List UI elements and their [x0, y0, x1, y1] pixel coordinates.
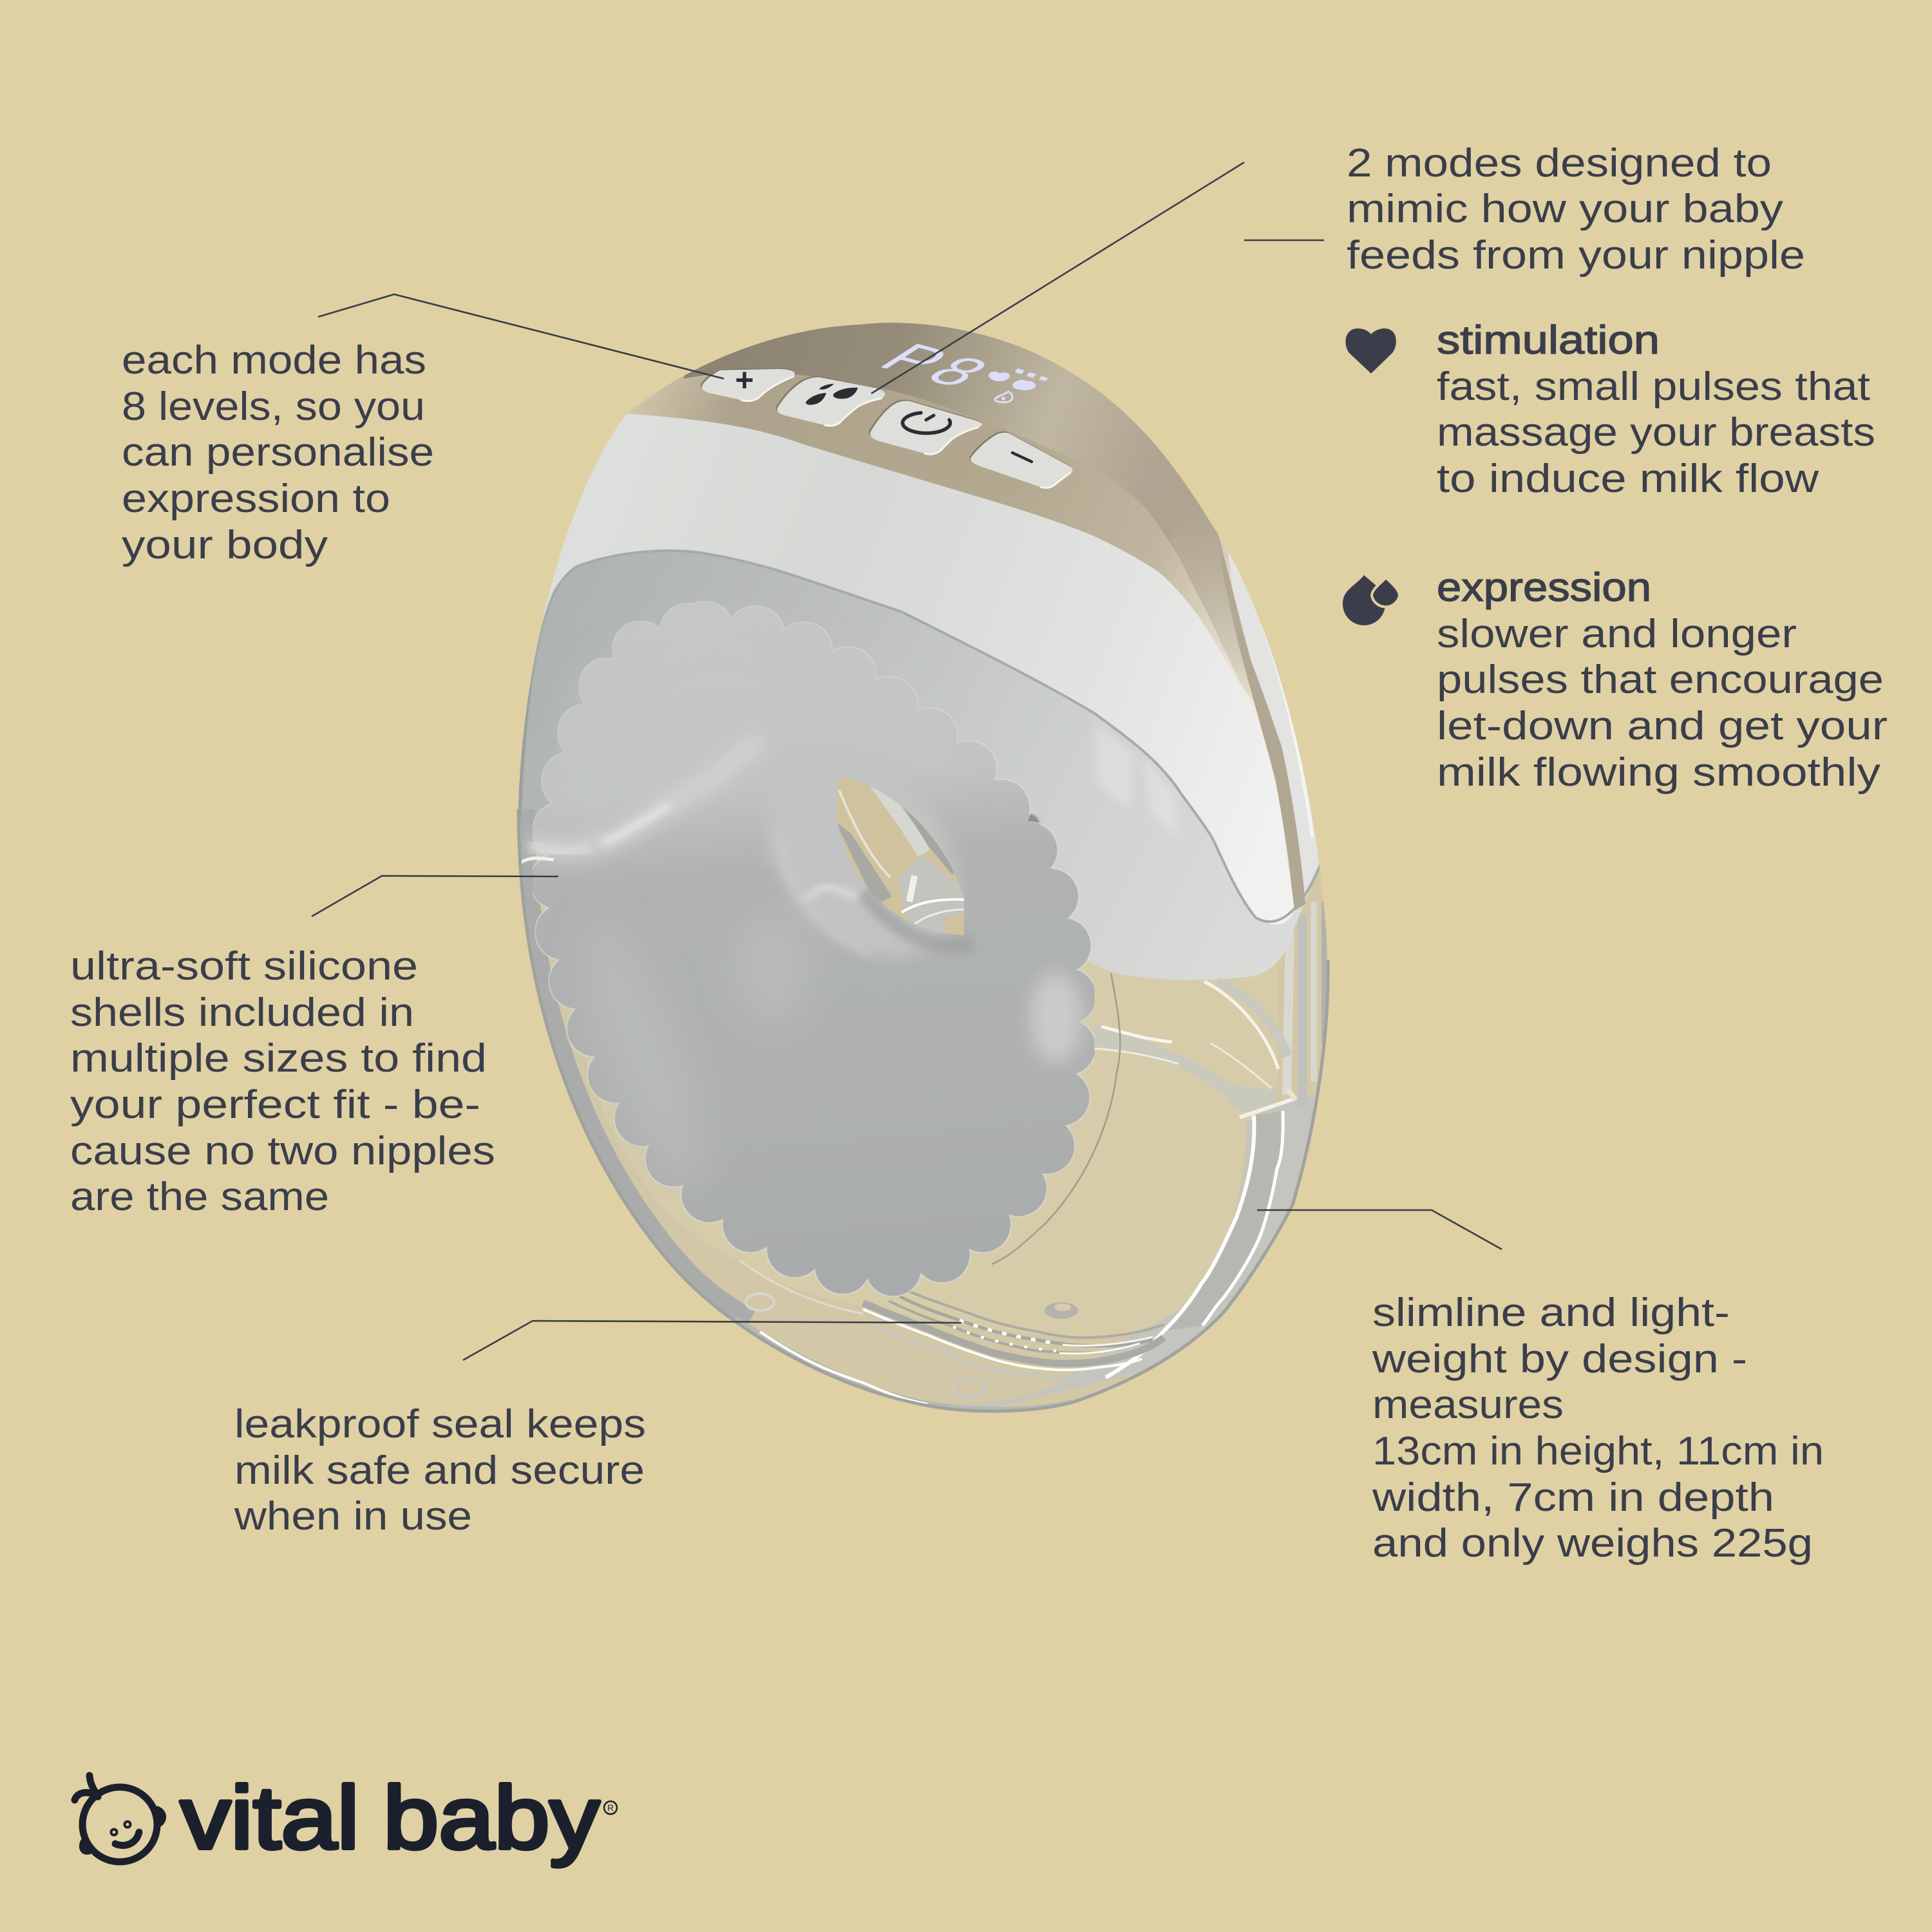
text: slimline: measures — [1372, 1383, 1564, 1427]
opening interior — [836, 777, 964, 935]
text: slimline: width, 7cm in depth — [1372, 1475, 1774, 1520]
button: plus — [701, 362, 795, 401]
bottom rim highlight — [760, 1332, 927, 1404]
white cap band — [509, 413, 1294, 925]
small nubs on shell — [746, 814, 1078, 1397]
text: stimulation: to induce milk flow — [1437, 457, 1819, 501]
clear right band — [953, 1095, 1340, 1417]
text: levels: your body — [122, 523, 328, 567]
text: slimline: slimline and light- — [1372, 1291, 1730, 1335]
registered mark: R — [607, 1803, 614, 1813]
cap gold band — [580, 309, 1269, 734]
text: stimulation — [1437, 318, 1875, 501]
callout line: leakproof seal — [463, 1321, 961, 1360]
button: plus: + — [735, 362, 754, 398]
translucent crescent under the cap — [519, 551, 1320, 980]
text: expression: milk flowing smoothly — [1437, 750, 1880, 795]
logo: vital baby — [75, 1768, 617, 1868]
neck and opening — [729, 719, 997, 994]
side panel light — [1170, 489, 1262, 708]
milk chamber interior — [580, 837, 1278, 1337]
text: silicone shells: cause no two nipples — [70, 1129, 495, 1173]
display readout: P8 — [864, 335, 1011, 397]
button: mode drops — [776, 376, 885, 426]
text: levels: expression to — [122, 477, 390, 521]
text: slimline: 13cm in height, 11cm in — [1372, 1429, 1824, 1473]
text: expression: slower and longer — [1437, 612, 1797, 656]
leakproof seal ribs — [741, 1261, 1164, 1383]
text: modes intro — [1347, 141, 1805, 278]
callout line: modes — [871, 162, 1244, 393]
text: stimulation: fast, small pulses that — [1437, 365, 1870, 409]
text: expression — [1437, 565, 1888, 795]
callout line: modes text tick — [1244, 240, 1324, 241]
text: expression: pulses that encourage — [1437, 658, 1884, 702]
back white housing strip — [1216, 531, 1320, 907]
text: modes intro: feeds from your nipple — [1347, 233, 1805, 278]
text: leakproof seal: when in use — [234, 1494, 472, 1539]
icon: drops — [1343, 575, 1399, 625]
button: minus — [969, 431, 1073, 488]
clear band between highlights — [1164, 1111, 1283, 1331]
soft body shading — [559, 910, 729, 1202]
text: levels: each mode has — [122, 338, 426, 383]
bright clear edge — [1106, 1090, 1296, 1378]
text: leakproof seal: leakproof seal keeps — [234, 1402, 646, 1446]
icon: baby face — [75, 1776, 162, 1862]
text: levels — [122, 338, 434, 567]
text: modes intro: 2 modes designed to — [1347, 141, 1772, 185]
text: leakproof seal — [234, 1402, 646, 1539]
wordmark — [180, 1768, 600, 1868]
text: levels: 8 levels, so you — [122, 384, 425, 429]
text: silicone shells: your perfect fit - be- — [70, 1083, 480, 1127]
text: silicone shells — [70, 944, 495, 1219]
display dome and side panel — [683, 309, 1262, 708]
text: expression: let-down and get your — [1437, 704, 1888, 748]
text: slimline — [1372, 1291, 1824, 1566]
text: leakproof seal: milk safe and secure — [234, 1448, 645, 1493]
silicone shell with scalloped edge — [530, 618, 1082, 1269]
wordmark: baby — [383, 1768, 600, 1868]
reflections on crescent — [1095, 721, 1179, 837]
upper lobe light — [567, 618, 966, 831]
text: levels: can personalise — [122, 430, 434, 475]
callout line: levels — [318, 294, 724, 379]
text: slimline: weight by design - — [1372, 1337, 1747, 1381]
text: slimline: and only weighs 225g — [1372, 1521, 1813, 1566]
inner channel — [992, 973, 1288, 1264]
wordmark: vital — [180, 1768, 359, 1868]
clear side column — [1287, 902, 1324, 1108]
text: modes intro: mimic how your baby — [1347, 187, 1783, 231]
text: stimulation: stimulation — [1437, 318, 1660, 363]
text: silicone shells: are the same — [70, 1175, 329, 1219]
clear shell base — [536, 692, 1328, 1406]
bottom clear rim — [734, 1320, 1074, 1412]
text: silicone shells: shells included in — [70, 990, 414, 1035]
ridge highlight — [530, 739, 762, 849]
button: power — [869, 400, 982, 454]
text: silicone shells: ultra-soft silicone — [70, 944, 418, 989]
text: expression: expression — [1437, 565, 1651, 610]
registered mark — [604, 1801, 617, 1814]
dark gold stripe — [1215, 523, 1305, 911]
callout line: slimline — [1257, 1210, 1502, 1249]
text: stimulation: massage your breasts — [1437, 410, 1875, 455]
product: wearable breast pump — [502, 309, 1340, 1423]
icon: heart — [1345, 328, 1396, 374]
clear outer outline — [518, 809, 1328, 1411]
left clear rim — [518, 809, 747, 1325]
neck highlight — [805, 887, 858, 900]
clear rim lines — [515, 551, 1320, 922]
text: silicone shells: multiple sizes to find — [70, 1036, 487, 1081]
callout line: silicone shells — [312, 876, 558, 916]
back seam — [1264, 629, 1312, 837]
clear shell and body, clipped to silhouette — [502, 309, 1340, 1423]
